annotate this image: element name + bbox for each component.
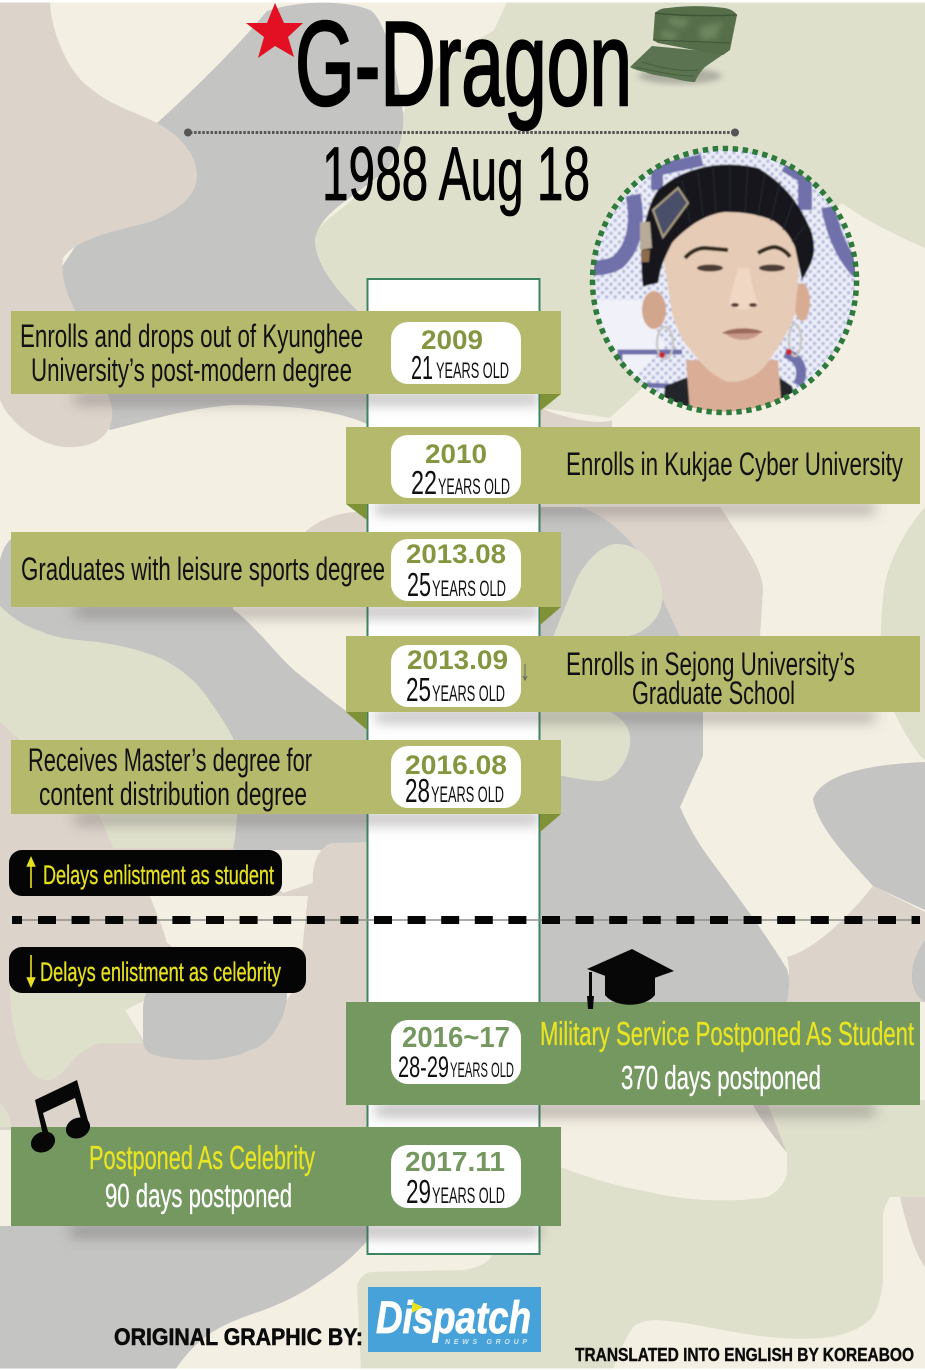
banner: 2013.09: 25 xyxy=(406,671,431,708)
text: Kyunghee University xyxy=(20,318,363,388)
banner: 2010: YEARS OLD xyxy=(438,474,510,499)
banner: 2013.08: 2013.08 xyxy=(406,539,506,569)
banner: 2010: 22 xyxy=(411,464,437,501)
banner: 2016-17 student postponement xyxy=(346,1002,920,1105)
icon: red star xyxy=(246,3,303,58)
banner: 2009: 2009 xyxy=(421,325,483,355)
banner: 2013.09: Graduate School xyxy=(632,675,795,711)
banner: 2017.11 celebrity postponement: YEARS OLD xyxy=(432,1183,505,1208)
banner: 2016.08: content distribution degree xyxy=(39,776,307,812)
banner shadows xyxy=(70,394,875,1236)
banner: 2016.08: 2016.08 xyxy=(405,750,507,780)
banner: 2016-17 student postponement: 28-29 xyxy=(398,1051,449,1084)
photo: G-Dragon portrait xyxy=(590,145,860,415)
banner: 2017.11 celebrity postponement: Postponed As Celebrity xyxy=(89,1139,315,1176)
logo: Dispatch: Dispatch xyxy=(376,1292,531,1343)
banner: 2009 xyxy=(11,311,561,411)
label: delays enlistment as student xyxy=(9,850,282,896)
banner: 2010: 2010 xyxy=(425,439,487,469)
banner: 2009: 21 xyxy=(411,349,433,386)
date of birth: 1988 Aug 18 xyxy=(322,132,590,217)
icon: army cap xyxy=(630,6,737,84)
banner: 2013.08: Graduates with leisure sports degree xyxy=(21,551,385,587)
banner: 2013.08: 25 xyxy=(407,566,431,603)
banner: 2017.11 celebrity postponement: 29 xyxy=(406,1173,431,1210)
banner: 2013.09 xyxy=(346,636,920,730)
label: delays enlistment as celebrity xyxy=(9,947,306,993)
banner: 2016-17 student postponement: YEARS OLD xyxy=(450,1059,514,1082)
icon: music notes xyxy=(27,1080,94,1156)
banner: 2016.08: 28 xyxy=(405,772,430,809)
banner: 2016.08: Receives Master’s degree for xyxy=(28,742,312,778)
title: G-Dragon: G-Dragon xyxy=(295,0,632,131)
banner: 2010 xyxy=(346,427,920,520)
banner: 2016-17 student postponement: 2016~17 xyxy=(402,1022,510,1054)
banner: 2009: YEARS OLD xyxy=(436,358,509,383)
label: delays enlistment as celebrity: Delays enlistment as celebrity xyxy=(40,957,281,987)
text: Kyunghee University: Enrolls and drops out of Kyunghee xyxy=(20,318,363,354)
credit: original graphic by: ORIGINAL GRAPHIC BY: xyxy=(114,1324,363,1351)
banner: 2013.08: YEARS OLD xyxy=(432,576,506,601)
logo: Dispatch xyxy=(368,1287,541,1352)
logo: Dispatch: NEWS GROUP xyxy=(445,1339,527,1346)
label: delays enlistment as student: Delays enlistment as student xyxy=(43,860,274,890)
banner: 2013.09: 2013.09 xyxy=(407,645,508,675)
divider: dotted line xyxy=(184,128,739,136)
banner: 2016-17 student postponement: 370 days postponed xyxy=(621,1059,821,1096)
banner: 2013.08 xyxy=(11,532,561,625)
banner: 2017.11 celebrity postponement xyxy=(11,1127,561,1226)
banner: 2013.09: YEARS OLD xyxy=(432,681,505,706)
timeline column xyxy=(368,279,540,1254)
divider: dashed line xyxy=(12,919,920,921)
banner: 2016.08 xyxy=(11,740,561,832)
text: Kyunghee University: University’s post-modern degree xyxy=(31,352,352,388)
banner: 2017.11 celebrity postponement: 90 days postponed xyxy=(105,1177,292,1214)
banner: 2017.11 celebrity postponement: 2017.11 xyxy=(405,1146,505,1177)
icon: graduation cap xyxy=(587,949,674,1009)
banner: 2016.08: YEARS OLD xyxy=(431,782,504,807)
